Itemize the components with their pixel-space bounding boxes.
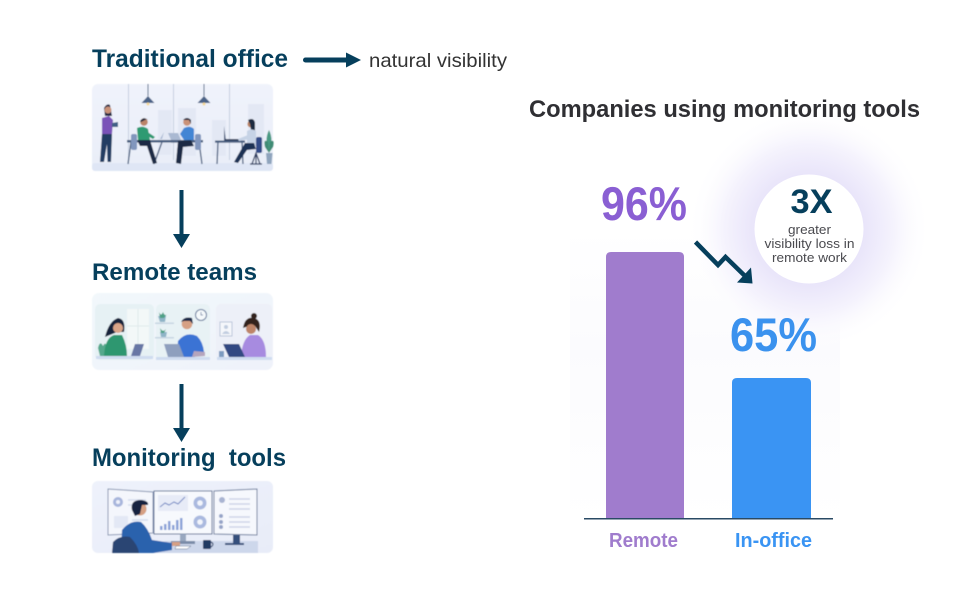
center monitor (154, 491, 212, 544)
desk and seated people (127, 118, 203, 164)
arrow: office to remote teams (173, 190, 190, 248)
illustration: monitoring tools (92, 481, 273, 553)
baseline (584, 518, 833, 520)
callout: 3X visibility loss: visibility loss in (764, 236, 854, 251)
arrow: office to natural visibility (303, 52, 361, 68)
bar chart panel (584, 177, 833, 552)
single desk worker (215, 119, 262, 164)
callout: 3X visibility loss: greater (788, 222, 832, 237)
bar: Remote (606, 252, 684, 518)
panel: woman in green (95, 304, 154, 360)
man at desk (112, 500, 191, 553)
chart title: Companies using monitoring tools (529, 96, 920, 123)
callout glow (687, 107, 931, 351)
callout: 3X visibility loss: 3X (790, 183, 833, 221)
label: In-office: In-office (735, 530, 812, 552)
chart backdrop glow (570, 230, 840, 520)
label: Remote: Remote (609, 530, 678, 552)
panel: man in blue (155, 304, 210, 360)
left monitor (108, 489, 153, 535)
standing woman (100, 104, 118, 162)
illustration: remote teams (92, 293, 273, 370)
heading: Remote teams: Remote teams (92, 259, 257, 286)
heading: Monitoring tools: Monitoring tools (92, 444, 286, 472)
bar: In-office (732, 378, 811, 518)
illustration: traditional office (92, 84, 274, 171)
arrow: zigzag decline (696, 242, 752, 284)
callout: 3X visibility loss: remote work (772, 250, 848, 265)
panel: woman in purple (216, 304, 272, 360)
heading: Traditional office: Traditional office (92, 45, 288, 73)
value: 96%: 96% (601, 177, 687, 230)
callout: 3X visibility loss (754, 174, 864, 284)
potted plant (264, 130, 274, 164)
value: 65%: 65% (730, 308, 817, 361)
text: natural visibility: natural visibility (369, 50, 507, 72)
arrow: remote teams to monitoring tools (173, 384, 190, 442)
right monitor (214, 489, 257, 545)
coffee mug (203, 540, 213, 549)
